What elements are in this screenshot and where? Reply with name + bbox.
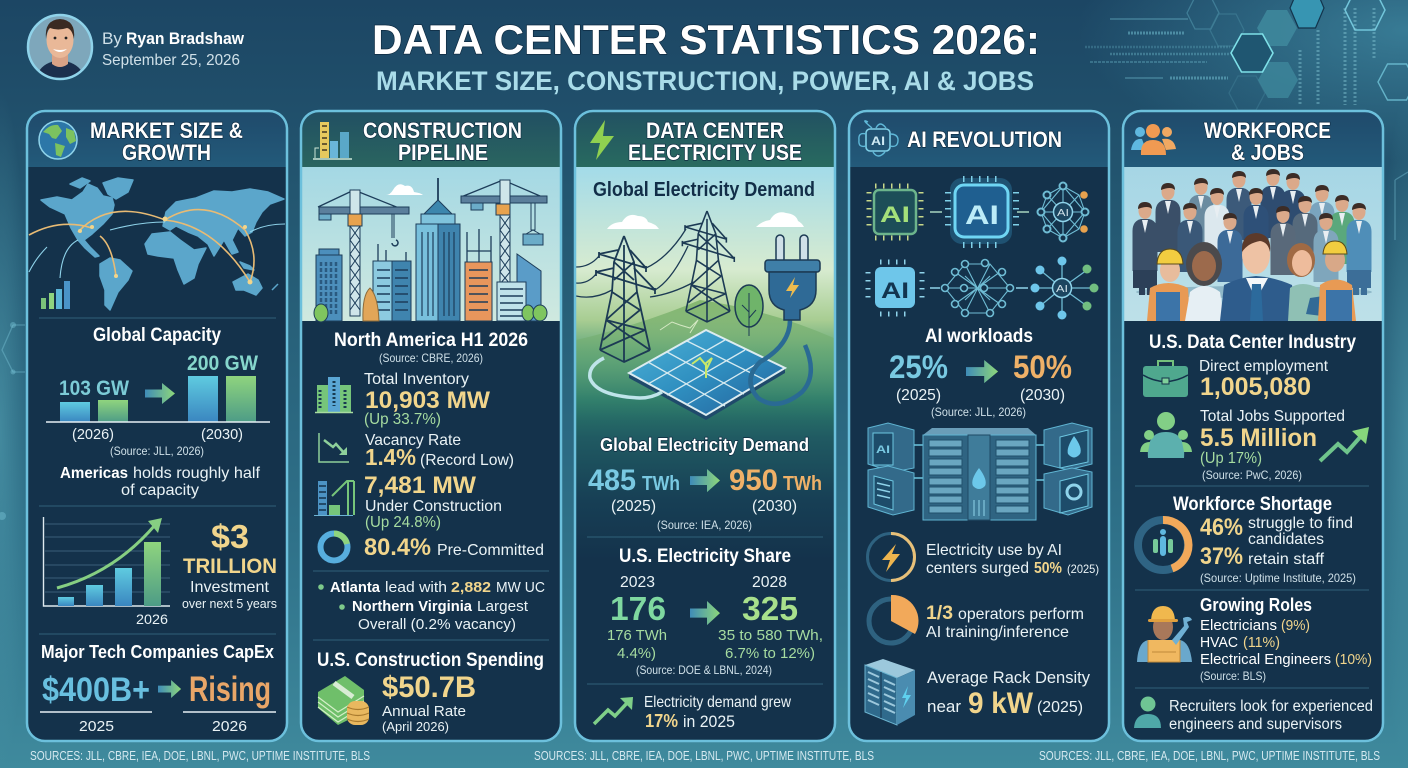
recruiters note [1134,696,1373,733]
icon: money stack [318,676,369,725]
US electricity share: U.S. Electricity Share [619,546,791,567]
stat: electricity surge [868,534,1099,580]
neural network [942,260,1014,316]
mini bar icon [41,281,70,309]
panel header [1123,111,1383,167]
workforce shortage [1138,494,1356,585]
byline: By [102,29,122,48]
stat: operators: operators perform [958,606,1084,623]
stat: vacancy: 1.4% [365,444,416,470]
stat: pre-committed: Pre-Committed [437,542,544,559]
investment stat: TRILLION [183,555,277,578]
growing roles: (9%) [1281,617,1310,634]
heading [90,118,243,165]
regional notes: Northern Virginia [352,598,473,615]
construction spending: $50.7B [382,671,476,704]
capex: 2026 [212,718,247,735]
icon: decline chart [319,433,349,462]
americas note: Americas [60,465,128,482]
icon: rack [865,659,915,725]
global demand stat: (2030) [752,498,797,515]
capex [40,642,276,735]
recruiters note: Recruiters look for experienced [1169,698,1373,715]
stat: operators [869,595,1084,643]
capacity bar chart: 103 GW [59,377,129,400]
title: MARKET SIZE, CONSTRUCTION, POWER, AI & JOBS [376,66,1034,96]
panel header [301,111,561,167]
network: top right [1038,182,1088,242]
stat: vacancy: Vacancy Rate [365,432,461,449]
byline: Ryan Bradshaw [126,29,245,48]
growing roles: Electricians [1200,617,1277,634]
stat: rack density: (2025) [1037,699,1083,716]
investment stat: $3 [211,518,249,555]
stat: under construction: 7,481 MW [364,472,476,499]
americas note [60,465,261,499]
arrow [690,601,720,625]
construction spending [317,650,544,734]
north america heading: (Source: CBRE, 2026) [379,351,483,365]
right buildings [497,254,541,321]
growing roles: Growing Roles [1200,595,1312,615]
stat: rack density: Average Rack Density [927,668,1090,687]
panel: electricity use [575,111,835,741]
AI workloads stat: (2030) [1020,387,1065,404]
americas note: holds roughly half [133,465,261,482]
heading: & JOBS [1231,140,1304,165]
icon: worker with wrench [1137,606,1192,662]
north america heading: North America H1 2026 [334,330,528,351]
regional notes [318,579,545,633]
footer sources: SOURCES: JLL, CBRE, IEA, DOE, LBNL, PWC, UPTIME INSTITUTE, BLS [534,748,874,763]
stat: total inventory: Total Inventory [364,371,469,388]
global capacity heading: Global Capacity [93,325,221,346]
investment stat: over next 5 years [182,596,277,611]
footer sources: SOURCES: JLL, CBRE, IEA, DOE, LBNL, PWC, UPTIME INSTITUTE, BLS [30,748,370,763]
panel: construction pipeline [301,111,561,741]
tree [735,285,763,336]
construction spending: U.S. Construction Spending [317,650,544,671]
heading: CONSTRUCTION [363,118,522,143]
AI workloads stat: (Source: JLL, 2026) [931,405,1026,419]
US electricity share: 35 to 580 TWh, [718,627,823,644]
demand growth note: 17% [645,711,678,731]
capacity bar chart: (Source: JLL, 2026) [110,444,204,458]
icon: construction [314,481,354,516]
workforce crowd illustration [1124,167,1382,321]
left cable [590,358,662,398]
capex: Rising [189,670,271,709]
regional notes: Atlanta [330,579,381,596]
server rack illustration [868,423,1092,520]
US electricity share: 2028 [752,574,787,591]
stat: rack density: 9 kW [968,687,1034,720]
front right worker [1318,241,1356,321]
stat: total jobs: Total Jobs Supported [1200,408,1345,425]
stat: rack density: near [927,697,961,716]
workforce shortage: candidates [1248,531,1324,548]
network: top right: AI [1057,208,1069,219]
AI workloads stat: 25% [889,349,948,385]
chip: glowing blue: AI [965,200,999,230]
AI workloads stat [889,326,1072,419]
byline [102,29,245,69]
investment stat: Investment [190,579,270,596]
heading: GROWTH [122,140,211,165]
icon: pie [869,595,919,643]
growing roles: (10%) [1335,651,1372,668]
title [372,16,1040,96]
global demand stat: 950 [729,464,778,497]
capacity bar chart [46,352,270,458]
panel: AI revolution [849,111,1109,741]
panel header [849,111,1109,167]
workforce shortage: Workforce Shortage [1173,494,1332,515]
growing roles [1137,595,1372,683]
demand growth note: in 2025 [683,712,735,731]
US electricity share: (Source: DOE & LBNL, 2024) [636,663,772,677]
growing roles: Electrical Engineers [1200,651,1331,668]
orange building [465,229,492,321]
heading: DATA CENTER [646,118,784,143]
icon: globe [39,121,77,159]
icon: growth arrow [1320,427,1369,461]
transmission towers [576,211,734,362]
world map [29,178,285,310]
US electricity share: 4.4%) [617,645,656,662]
heading: ELECTRICITY USE [628,140,802,165]
stat: total jobs: (Source: PwC, 2026) [1202,468,1302,482]
icon: bolt ring [868,534,914,580]
demand growth note [594,694,791,731]
chip: light blue: AI [881,278,909,303]
heading: MARKET SIZE & [90,118,243,143]
chip: green: AI [880,202,910,227]
icon: building [315,377,353,412]
heading: AI REVOLUTION [907,127,1062,152]
illustration background [576,167,834,560]
growing roles: (11%) [1243,634,1280,651]
AI chips and networks diagram [868,178,1098,320]
stat: direct employment [1143,358,1329,401]
illustration heading: Global Electricity Demand [593,179,815,201]
construction spending: (April 2026) [382,719,449,734]
heading [363,118,522,165]
recruiters note: engineers and supervisors [1169,716,1342,733]
stat: pre-committed: 80.4% [364,534,431,561]
crane left [318,190,409,316]
workforce shortage: struggle to find [1248,515,1353,532]
stat: total inventory [315,371,490,428]
panel header [575,111,835,167]
US electricity share: 6.7% to 12%) [725,645,815,662]
capex: 2025 [79,718,114,735]
front woman [1185,242,1224,321]
regional notes: lead with [385,579,447,596]
global demand stat: (2025) [611,498,656,515]
icon: briefcase [1143,361,1188,397]
front man [1220,233,1296,321]
chip: light blue [868,262,922,314]
icon: team [1131,124,1176,155]
regional notes: 2,882 [451,579,491,596]
front left worker [1147,249,1190,321]
capacity bar chart: (2030) [201,426,243,443]
stat: total inventory: 10,903 MW [365,387,490,414]
construction illustration [302,167,560,322]
americas note: of capacity [121,482,199,499]
icon: donut [320,534,348,560]
workforce shortage: 37% [1200,543,1243,570]
byline: September 25, 2026 [102,52,240,69]
plug and cord [750,235,820,404]
global demand stat: Global Electricity Demand [600,435,809,455]
regional notes: Overall (0.2% vacancy) [358,616,516,633]
icon: people [1140,412,1192,458]
back rows [1132,169,1372,282]
investment growth chart [44,517,170,627]
US electricity share: 2023 [620,574,655,591]
stat: operators: 1/3 [926,603,953,624]
mid building [373,244,411,321]
chip: green [869,186,921,238]
arrow [158,680,181,698]
title: DATA CENTER STATISTICS 2026: [372,16,1040,63]
avatar [28,15,92,80]
solar panel [629,330,785,420]
chip: glowing blue [948,178,1016,245]
heading [1204,118,1331,165]
AI workloads stat: AI workloads [925,326,1033,347]
US electricity share: 176 [610,590,666,627]
central tower [416,178,460,321]
investment growth chart: 2026 [136,611,168,627]
left building [316,249,342,321]
stat: operators: AI training/inference [926,624,1069,641]
growing roles: (Source: BLS) [1200,669,1266,683]
icon: lightning bolt [590,120,614,160]
server rack illustration: AI [876,444,890,456]
stat: pre-committed [320,534,544,561]
investment stat [182,518,277,611]
power grid illustration [576,211,834,420]
US electricity share: 325 [742,590,798,627]
icon: donut with people [1138,520,1188,570]
workforce shortage: 46% [1200,514,1243,541]
stat: direct employment: Direct employment [1199,358,1329,375]
panel header [27,111,287,167]
stat: total jobs [1140,408,1369,482]
icon: trend arrow [594,697,633,724]
network: bottom right: AI [1056,284,1068,295]
footer sources [30,748,1380,763]
global demand stat: TWh [783,473,822,495]
arrow [690,469,720,492]
icon: person [1134,696,1161,728]
stat: electricity surge: Electricity use by AI [926,542,1062,559]
heading: WORKFORCE [1204,118,1331,143]
icon: AI chip: AI [871,134,885,148]
stat: direct employment: 1,005,080 [1200,373,1311,401]
stat: vacancy [319,432,514,470]
growing roles: HVAC [1200,634,1238,651]
AI workloads stat: (2025) [896,387,941,404]
stat: under construction: (Up 24.8%) [365,514,441,531]
capacity bar chart: (2026) [72,426,114,443]
stat: total inventory: (Up 33.7%) [364,411,441,428]
north america heading [334,330,528,365]
crane right [461,180,547,284]
arrow [966,360,998,383]
icon: AI chip [859,121,898,156]
heading [628,118,802,165]
heading: PIPELINE [398,140,488,165]
arrow [145,383,175,404]
front right woman [1287,243,1330,321]
regional notes: Largest [477,598,529,615]
demand growth note: Electricity demand grew [644,694,791,711]
workforce shortage: (Source: Uptime Institute, 2025) [1200,571,1356,585]
stat: electricity surge: centers surged [926,560,1029,577]
stat: electricity surge: (2025) [1067,562,1099,576]
AI workloads stat: 50% [1013,349,1072,385]
capex: Major Tech Companies CapEx [41,642,274,662]
stat: under construction: Under Construction [365,498,502,515]
icon: buildings [313,122,352,159]
workforce shortage: retain staff [1248,551,1325,568]
trees and figure [314,288,547,322]
regional notes: MW UC [496,579,545,596]
US electricity share [607,546,823,677]
global demand stat: 485 [588,464,636,497]
stat: under construction [314,472,502,531]
US electricity share: 176 TWh [607,627,667,644]
network: bottom right [1030,256,1098,320]
stat: total jobs: 5.5 Million [1200,424,1317,452]
industry heading: U.S. Data Center Industry [1149,332,1356,353]
stat: rack density [865,659,1090,725]
panel: market size and growth [27,111,287,741]
global demand stat: TWh [642,473,680,495]
global demand stat: (Source: IEA, 2026) [657,518,752,532]
panel: workforce and jobs [1123,111,1383,741]
capacity bar chart: 200 GW [187,352,258,375]
global demand stat [588,435,822,532]
stat: electricity surge: 50% [1034,560,1062,577]
construction spending: Annual Rate [382,703,466,720]
stat: vacancy: (Record Low) [420,452,514,469]
capex: $400B+ [42,671,150,709]
stat: total jobs: (Up 17%) [1200,450,1262,467]
